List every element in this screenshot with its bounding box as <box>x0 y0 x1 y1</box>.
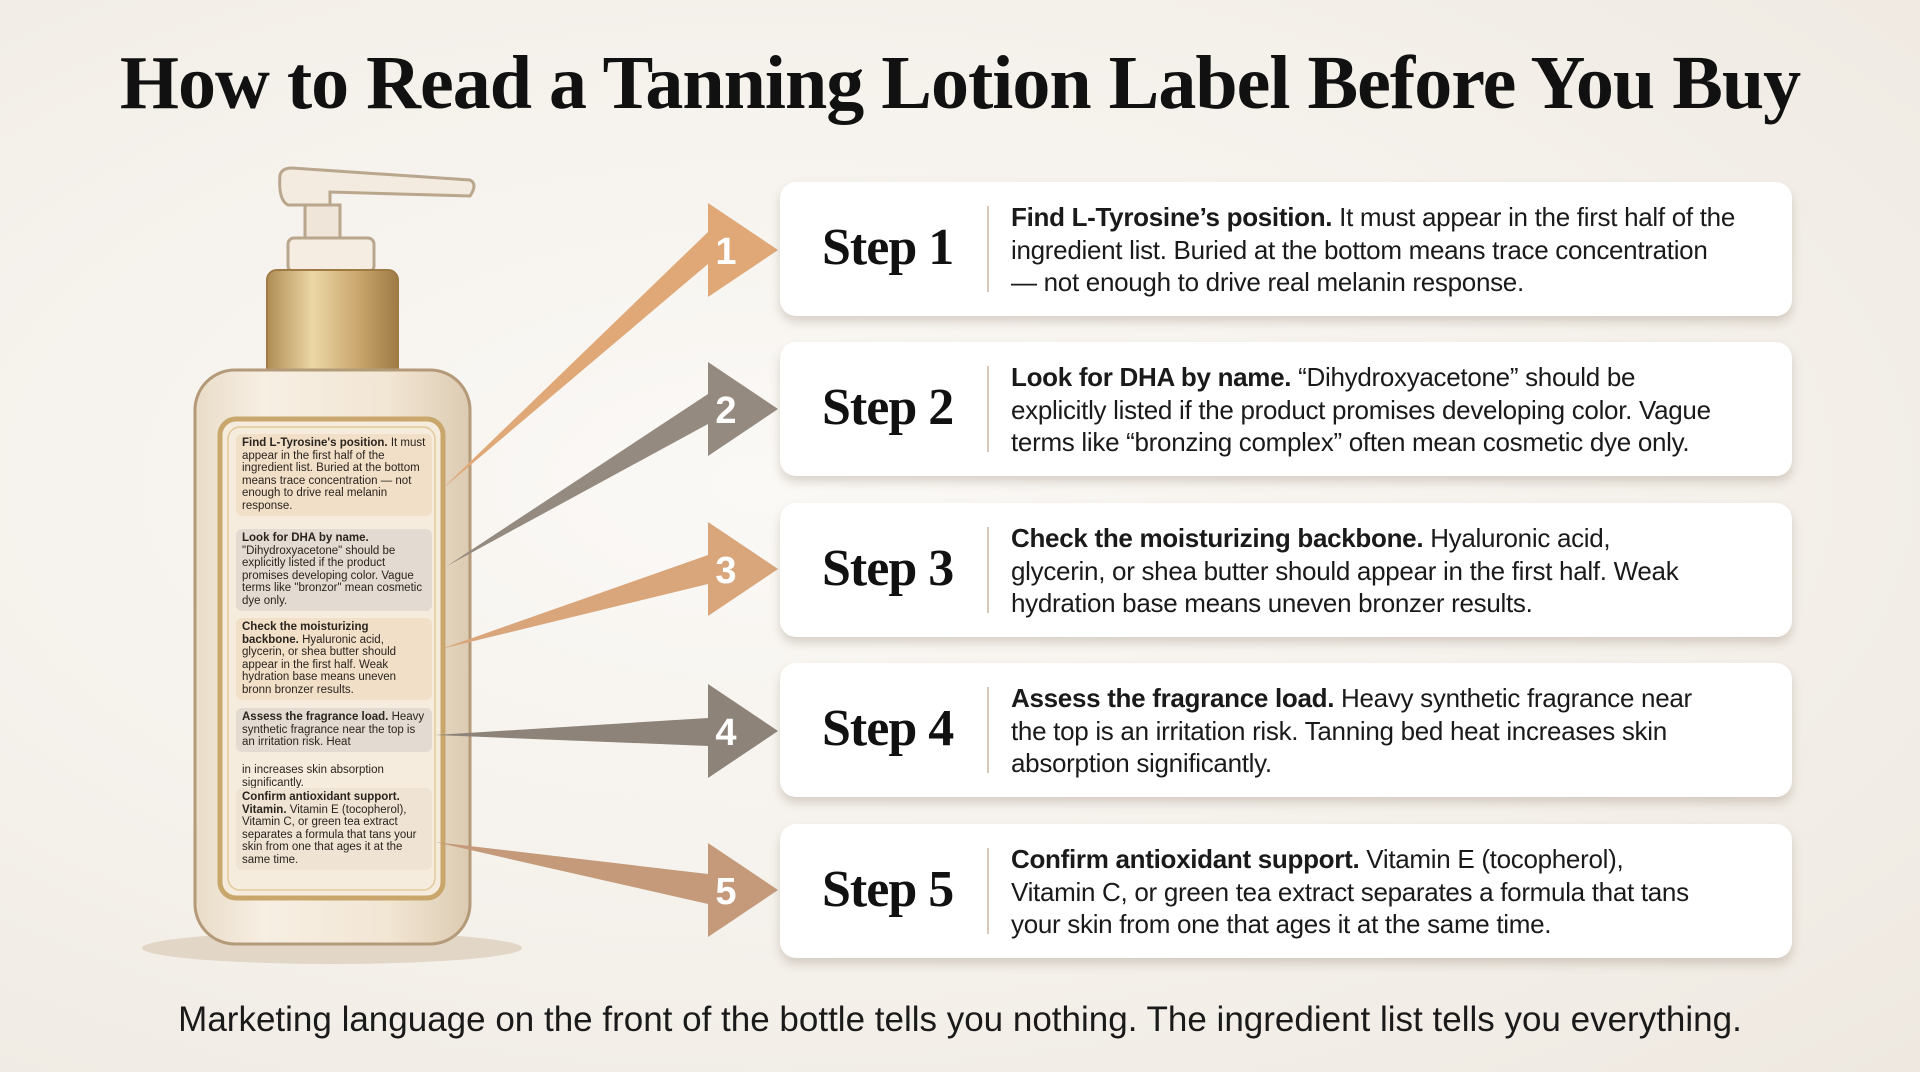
arrow 1: 1 <box>715 231 737 273</box>
card: step 1: ingredient list. Buried at the bottom means trace concentration <box>1011 234 1708 264</box>
label block 3: Check the moisturizing backbone. Hyaluronic acid, glycerin, or shea butter should appear in the first half. Weak hydration base means uneven bronn bronzer results. <box>242 621 396 696</box>
arrow 5 <box>435 842 778 937</box>
card: step 2: Look for DHA by name. “Dihydroxyacetone” should be <box>1011 362 1635 392</box>
card: step 2 <box>780 342 1792 476</box>
card: step 3 <box>780 503 1792 637</box>
card: step 4: absorption significantly. <box>1011 748 1272 778</box>
label block 4: Assess the fragrance load. Heavy synthetic fragrance near the top is an irritation risk. Heat <box>242 711 424 748</box>
card: step 5: Confirm antioxidant support. Vitamin E (tocopherol), <box>1011 844 1623 874</box>
arrow 5: 5 <box>715 871 737 913</box>
card: step 2: explicitly listed if the product promises developing color. Vague <box>1011 394 1711 424</box>
arrow 2 <box>447 362 778 566</box>
card: step 1: — not enough to drive real melanin response. <box>1011 267 1524 297</box>
illustration: bottle <box>142 166 522 964</box>
arrow 3: 3 <box>715 550 737 592</box>
card: step 3: Check the moisturizing backbone. Hyaluronic acid, <box>1011 523 1610 553</box>
card: step 3: Step 3 <box>822 540 953 597</box>
card: step 2: terms like “bronzing complex” often mean cosmetic dye only. <box>1011 427 1689 457</box>
arrow 3 <box>441 522 778 649</box>
card: step 4: Step 4 <box>822 700 953 757</box>
arrow 4: 4 <box>715 712 737 754</box>
arrow 1 <box>441 203 778 490</box>
label block 1: Find L-Tyrosine's position. It must appear in the first half of the ingredient list. Buried at the bottom means trace concentration — not enough to drive real melanin response. <box>242 437 425 512</box>
card: step 1: Step 1 <box>822 219 953 276</box>
arrow 2: 2 <box>715 390 737 432</box>
card: step 5: your skin from one that ages it at the same time. <box>1011 909 1551 939</box>
card: step 1: Find L-Tyrosine’s position. It must appear in the first half of the <box>1011 202 1735 232</box>
card: step 5 <box>780 824 1792 958</box>
label block 2: Look for DHA by name. "Dihydroxyacetone" should be explicitly listed if the product promises developing color. Vague terms like "bronzor" mean cosmetic dye only. <box>242 532 422 607</box>
title: How to Read a Tanning Lotion Label Before You Buy <box>120 41 1800 125</box>
label block 4 continuation: in increases skin absorption significantly. <box>242 764 384 789</box>
arrows <box>436 203 778 937</box>
card: step 5: Vitamin C, or green tea extract separates a formula that tans <box>1011 876 1689 906</box>
card: step 5: Step 5 <box>822 861 953 918</box>
card: step 3: glycerin, or shea butter should appear in the first half. Weak <box>1011 556 1678 586</box>
card: step 2: Step 2 <box>822 379 953 436</box>
arrow 4 <box>435 684 778 778</box>
label block 5: Confirm antioxidant support. Vitamin. Vitamin E (tocopherol), Vitamin C, or green tea extract separates a formula that tans your skin from one that ages it at the same time. <box>242 791 417 866</box>
card: step 4: the top is an irritation risk. Tanning bed heat increases skin <box>1011 716 1667 746</box>
card: step 3: hydration base means uneven bronzer results. <box>1011 588 1533 618</box>
card: step 1 <box>780 182 1792 316</box>
card: step 4 <box>780 663 1792 797</box>
bottle label text <box>236 434 432 870</box>
card: step 4: Assess the fragrance load. Heavy synthetic fragrance near <box>1011 683 1692 713</box>
footer note: Marketing language on the front of the bottle tells you nothing. The ingredient list tells you everything. <box>178 1000 1742 1039</box>
